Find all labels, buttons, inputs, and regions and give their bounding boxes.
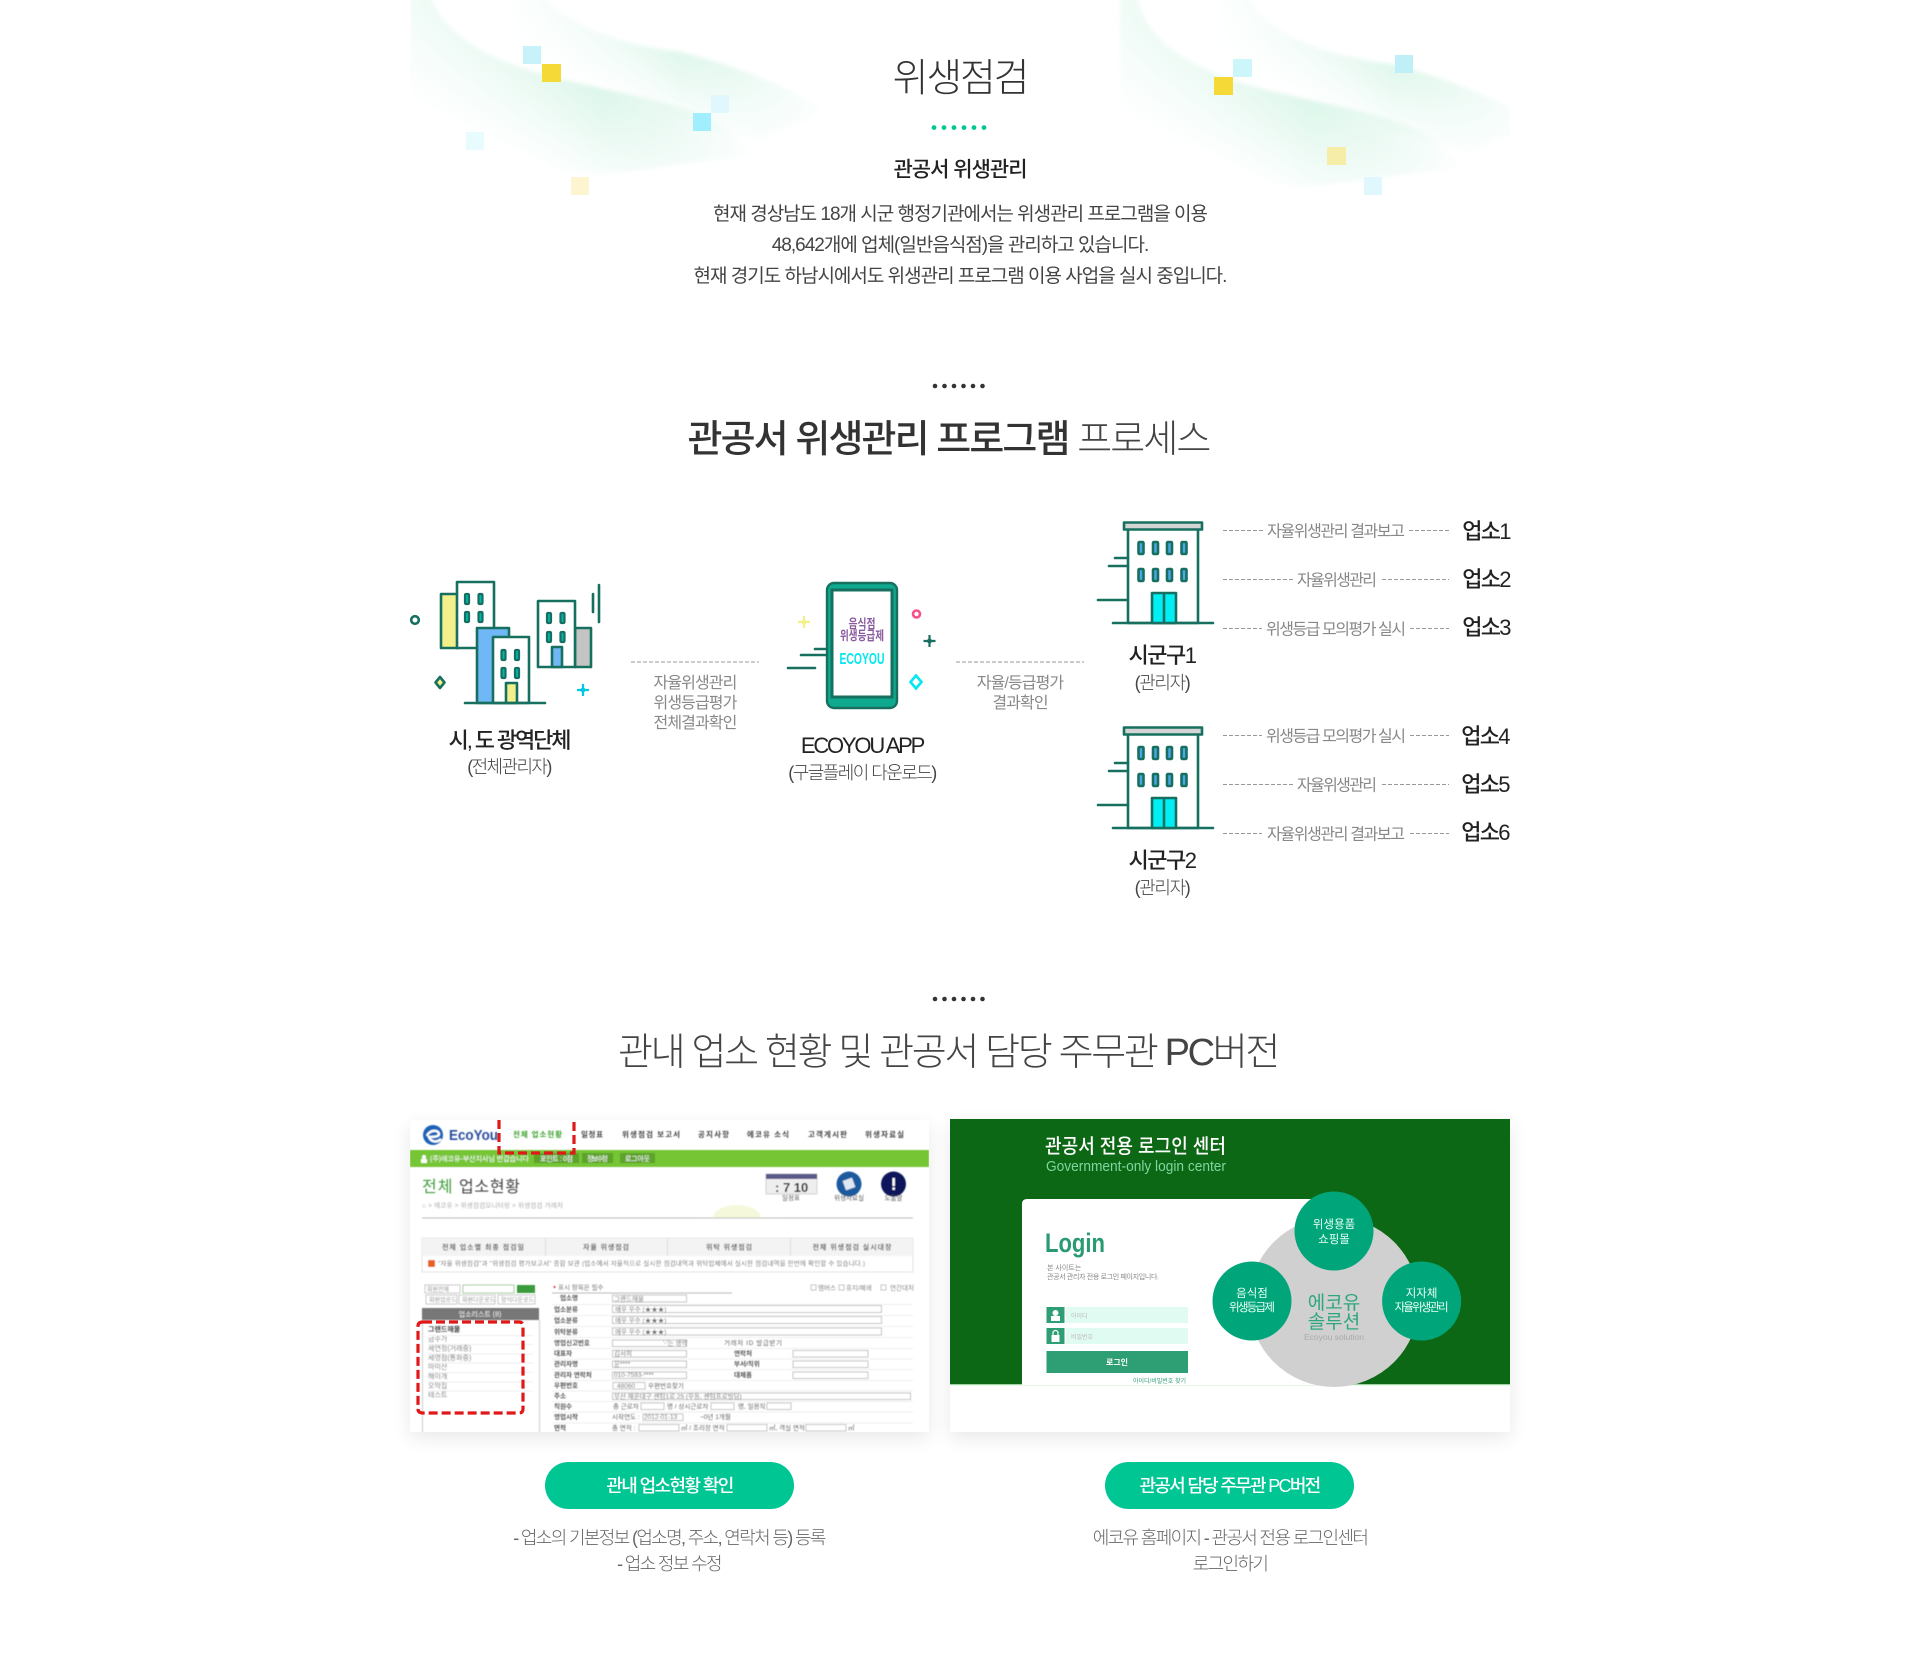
icon: phone app: 음식점 [848, 617, 876, 631]
screenshot: business status: 매우 우수 (★★★) [615, 1316, 666, 1324]
screenshot: business status: 일정표 [782, 1193, 800, 1202]
screenshot: business status: 회원전체 [427, 1286, 449, 1294]
screenshot: government login center: Login [1045, 1228, 1105, 1258]
screenshot: business status: 공지사항 [698, 1129, 729, 1139]
screenshot: business status [410, 1120, 929, 1432]
PC version heading: 관내 업소 현황 및 관공서 담당 주무관 PC버전 [618, 1032, 1278, 1074]
label: city and province: 시, 도 광역단체 [449, 728, 569, 753]
screenshot: business status: 매우 우수 (★★★) [615, 1306, 666, 1314]
screenshot: business status: 회원다운로드 [462, 1296, 496, 1304]
icon: city buildings [410, 580, 600, 704]
screenshot: business status: 부산 해운대구 센텀1로 25 (우동, 센텀프로빌딩) [614, 1392, 742, 1400]
screenshot: business status: 관리자 연락처 [554, 1370, 592, 1379]
screenshot: government login center: 자율위생관리 [1395, 1301, 1449, 1314]
button: officer PC version: 관공서 담당 주무관 PC버전 [1139, 1476, 1320, 1496]
screenshot: business status: 그랜드해물 [428, 1324, 461, 1334]
screenshot: business status: 그랜드해물 [614, 1294, 644, 1303]
intro text: 현재 경기도 하남시에서도 위생관리 프로그램 이용 사업을 실시 중입니다. [694, 266, 1226, 286]
screenshot: business status: 업소현황 [459, 1178, 520, 1196]
screenshot: business status: 우편번호찾기 [648, 1381, 684, 1390]
screenshot: business status: 연락처 [734, 1348, 752, 1358]
screenshot: business status: 매우 우수 (★★★) [615, 1328, 666, 1336]
screenshot: business status: 위탁분류 [554, 1327, 578, 1336]
screenshot: business status: 멤버스 [818, 1283, 836, 1292]
business 1: 업소1 [1462, 519, 1510, 544]
button: check businesses: 관내 업소현황 확인 [606, 1476, 733, 1496]
dashed connectors and labels for businesses: 자율위생관리 [1297, 776, 1377, 794]
icon: phone app: 위생등급제 [840, 628, 884, 643]
screenshot: business status: 대체폼 [734, 1370, 752, 1379]
screenshot: business status: 주소 [554, 1392, 566, 1400]
screenshot: government login center: 에코유 [1308, 1292, 1360, 1314]
screenshot: government login center: 비밀번호 [1071, 1333, 1094, 1341]
screenshot: business status: ~0년 1개월 [700, 1412, 731, 1421]
screenshot: business status: 휴지/폐쇄 [846, 1283, 872, 1292]
screenshot: business status: 전체 업소현황 [513, 1129, 562, 1139]
connector text 2: 자율/등급평가 [977, 675, 1063, 692]
dashed connectors and labels for businesses: 자율위생관리 결과보고 [1267, 522, 1405, 540]
intro text: 현재 경상남도 18개 시군 행정기관에서는 위생관리 프로그램을 이용 [713, 204, 1207, 224]
arrow: dashed connector 2 [956, 662, 1084, 663]
screenshot: business status: 부서/직위 [734, 1359, 760, 1368]
screenshot: business status: ㎡, 객실 면적 [769, 1423, 805, 1432]
icon: district building 1 [1096, 521, 1214, 624]
description right: 로그인하기 [1193, 1554, 1267, 1574]
screenshot: business status: '-'는 생략 [663, 1338, 687, 1347]
screenshot: business status: 테스트 [428, 1391, 448, 1399]
dashed connectors and labels for businesses: 위생등급 모의평가 실시 [1266, 620, 1406, 638]
screenshot: government login center: 지자체 [1406, 1287, 1437, 1300]
screenshot: business status: 전체 [422, 1178, 453, 1196]
screenshot: business status: 48060 [617, 1383, 635, 1390]
dashed connectors and labels for businesses: 위생등급 모의평가 실시 [1266, 728, 1406, 746]
description right [1093, 1528, 1367, 1574]
icon: phone app [786, 582, 936, 710]
screenshot: business status: 전체 업소별 최종 점검일 [442, 1242, 524, 1252]
screenshot: business status: 위탁 위생점검 [706, 1242, 752, 1252]
screenshot: business status: 표시 항목은 필수 [558, 1282, 603, 1292]
screenshot: business status: 로그아웃 [625, 1154, 651, 1163]
screenshot: business status: : 7 10 [775, 1180, 808, 1195]
button: officer PC version [1105, 1462, 1354, 1509]
screenshot: government login center: 솔루션 [1308, 1311, 1360, 1333]
screenshot: government login center: 로그인 [1106, 1357, 1128, 1367]
screenshot: business status: 010-7593-**** [614, 1372, 654, 1379]
screenshot: business status: 시작연도 : [612, 1412, 640, 1421]
screenshot: business status: 오막집 [428, 1381, 447, 1390]
screenshot: government login center: 아이디/비밀번호 찾기 [1133, 1377, 1186, 1385]
screenshot: business status: 전체 위생점검 실시대장 [812, 1242, 892, 1252]
screenshot: business status: 고객게시판 [808, 1129, 847, 1139]
icon: district building 2 [1096, 726, 1214, 830]
screenshot: business status: 연간대처 [890, 1283, 914, 1292]
business 3: 업소3 [1462, 615, 1510, 640]
screenshot: business status: 명 / 상시근로자 [667, 1402, 708, 1410]
screenshot: business status: 명, 일용직 [738, 1402, 766, 1410]
screenshot: business status: 정보수정 [587, 1154, 608, 1163]
screenshot: business status: 관리자명 [554, 1359, 578, 1368]
arrow: dashed connector 1 [631, 662, 759, 663]
label: district 2: 시군구2 [1129, 848, 1195, 873]
screenshot: business status: 업소분류 [554, 1316, 578, 1324]
description left: - 업소 정보 수정 [617, 1554, 721, 1574]
screenshot: business status: 위생자료실 [834, 1193, 864, 1202]
screenshot: business status: 일정표 [581, 1129, 603, 1139]
screenshot: business status: 총 근로자 [613, 1402, 639, 1410]
description left: - 업소의 기본정보 (업소명, 주소, 연락처 등) 등록 [513, 1528, 825, 1548]
business 4: 업소4 [1461, 724, 1509, 749]
screenshot: business status: ㎡ [848, 1423, 855, 1432]
connector text 1: 전체결과확인 [654, 715, 736, 732]
screenshot: business status: 마미산 [428, 1362, 448, 1371]
screenshot: business status: 총 면적 : [612, 1423, 636, 1432]
icon: phone app: ECOYOU [840, 651, 884, 668]
screenshot: business status: 업소명 [560, 1293, 578, 1302]
label: google play: (구글플레이 다운로드) [788, 763, 936, 783]
screenshot: business status: 대표자 [554, 1348, 572, 1358]
screenshot: business status: (주)에코유-부산지사님 반갑습니다 [430, 1154, 530, 1163]
screenshot: business status: 도움말 [885, 1194, 902, 1202]
button: check businesses [545, 1462, 794, 1509]
label: admin 1: (관리자) [1135, 673, 1189, 693]
screenshot: government login center: 쇼핑몰 [1318, 1233, 1350, 1246]
screenshot: business status: 회원업로드 [429, 1296, 457, 1304]
connector text 2 [977, 674, 1064, 712]
subtitle: 관공서 위생관리 [893, 158, 1027, 181]
process heading: 관공서 위생관리 프로그램 프로세스 [688, 419, 1209, 461]
highlight: red dashed boxes [418, 1120, 574, 1413]
intro text: 48,642개에 업체(일반음식점)을 관리하고 있습니다. [772, 234, 1148, 256]
screenshot: government login center: Government-only login center [1046, 1159, 1226, 1175]
screenshot: business status: 영업시작 [554, 1412, 578, 1421]
screenshot: government login center [950, 1119, 1510, 1432]
business 5: 업소5 [1461, 772, 1509, 797]
business 6: 업소6 [1461, 820, 1509, 845]
screenshot: business status: 업소리스트 (8) [459, 1310, 501, 1318]
label: total admin: (전체관리자) [467, 757, 551, 777]
label: district 1: 시군구1 [1129, 643, 1195, 668]
title: 위생점검 [893, 58, 1027, 101]
screenshot: government login center: 음식점 [1236, 1287, 1268, 1300]
screenshot: government login center: 관공서 전용 로그인 센터 [1045, 1135, 1226, 1158]
screenshot: business status: ㎡ / 조리장 면적 [681, 1423, 725, 1432]
screenshot: business status: 양식다운로드 [501, 1296, 535, 1304]
screenshot: government login center: 본 사이트는 [1047, 1263, 1082, 1272]
screenshot: business status: 업소분류 [554, 1304, 578, 1314]
screenshot: business status: EcoYou [449, 1127, 498, 1144]
screenshot: business status: 2012-01-13 [644, 1414, 678, 1421]
description right: 에코유 홈페이지 - 관공서 전용 로그인센터 [1093, 1528, 1367, 1548]
screenshot: business status: 영업신고번호 [554, 1338, 590, 1347]
screenshot: business status: 해이개 [428, 1372, 447, 1380]
screenshot: government login center: 위생용품 [1313, 1218, 1355, 1231]
screenshot: business status: 위생자료실 [865, 1129, 904, 1139]
dark dots 2 [932, 996, 985, 1002]
connector text 2: 결과확인 [992, 695, 1048, 712]
screenshot: business status: 자율 위생점검 [583, 1242, 629, 1252]
description left [513, 1528, 826, 1574]
screenshot: business status: 문**** [614, 1360, 631, 1368]
screenshot: business status: 우편번호 [554, 1380, 578, 1390]
screenshot: business status: 세연정(거래중) [428, 1344, 471, 1352]
screenshot: business status: ⌂ > 에코유 > 위생점검모니터링 > 위생점검 거래처 [422, 1200, 563, 1210]
dashed connectors and labels for businesses: 자율위생관리 결과보고 [1267, 826, 1405, 844]
screenshot: business status: 포인트 : 0점 [540, 1154, 573, 1163]
dashed connectors and labels for businesses: 자율위생관리 [1297, 572, 1377, 590]
screenshot: government login center: 위생등급제 [1229, 1301, 1275, 1314]
green dots [932, 125, 986, 130]
screenshot: business status: 거래처 ID 발급받기 [724, 1338, 782, 1347]
connector text 1: 자율위생관리 [654, 675, 736, 692]
screenshot: government login center: Ecoyou solution [1304, 1332, 1364, 1342]
screenshot: government login center: 아이디 [1071, 1312, 1088, 1320]
screenshot: business status: 면적 [554, 1423, 566, 1432]
screenshot: business status: "자율 위생점검"과 "위생점검 평가보고서" 종합 보관 (업소에서 자율적으로 실시한 점검내역과 위탁업체에서 실시한 점검내역을 한번에 확인할 수 있습니다.) [438, 1258, 865, 1268]
screenshot: business status: 직원수 [554, 1402, 572, 1410]
screenshot: business status: 금수가 [428, 1334, 448, 1343]
dashed connectors and labels for businesses [1223, 522, 1449, 844]
screenshot: business status: 위생점검 보고서 [622, 1129, 680, 1139]
background: green waves and squares [411, 0, 1504, 195]
screenshot: government login center: 관공서 관리자 전용 로그인 페이지입니다. [1047, 1272, 1159, 1281]
screenshot: business status: 세영점(통화중) [428, 1353, 471, 1362]
screenshot: business status: 에코유 소식 [747, 1129, 789, 1139]
dark dots [932, 384, 985, 388]
connector text 1 [654, 674, 737, 732]
label: admin 2: (관리자) [1135, 878, 1189, 898]
connector text 1: 위생등급평가 [654, 695, 736, 712]
intro text [694, 204, 1226, 286]
business 2: 업소2 [1462, 567, 1510, 592]
screenshot: business status: 김서희 [614, 1348, 632, 1358]
label: ecoyou app: ECOYOU APP [801, 733, 923, 758]
